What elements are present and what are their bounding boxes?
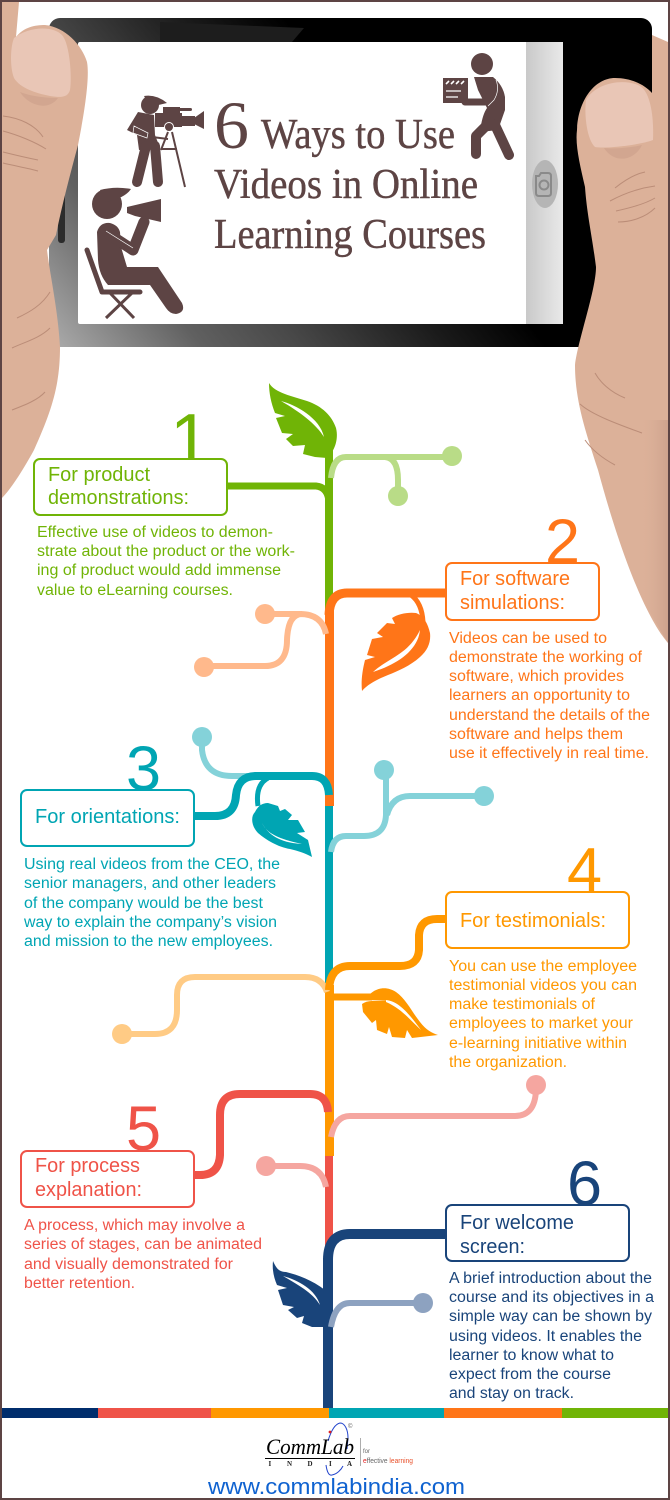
icon: teal leaf bbox=[252, 803, 312, 857]
logo: for bbox=[363, 1449, 370, 1455]
panel 2: software simulations: use it effectively in real time. bbox=[449, 745, 649, 762]
panel 2: software simulations: software, which provides bbox=[449, 668, 624, 685]
icon: green leaf bbox=[269, 383, 337, 458]
panel 6: welcome screen: expect from the course bbox=[449, 1366, 611, 1383]
panel 2: software simulations: understand the details of the bbox=[449, 707, 650, 724]
branch group 6: navy bbox=[328, 1234, 446, 1327]
panel 6: welcome screen: For welcome bbox=[460, 1212, 574, 1234]
panel 1: product demonstrations: ing of product would add immense bbox=[37, 562, 281, 579]
branch group 5: red bbox=[194, 1075, 546, 1187]
panel 2: software simulations: Videos can be used to bbox=[449, 630, 607, 647]
logo bbox=[265, 1423, 413, 1475]
footer colour bar bbox=[2, 1408, 668, 1418]
panel 5: process explanation bbox=[21, 1094, 262, 1292]
logo: © bbox=[348, 1423, 353, 1430]
icon: clapperboard man bbox=[443, 53, 509, 155]
icon: cameraman bbox=[127, 96, 204, 187]
panel 1: product demonstrations: For product bbox=[48, 464, 150, 486]
icon: navy leaf bbox=[273, 1261, 325, 1327]
phone screen bbox=[78, 42, 563, 324]
icon: orange leaf bbox=[362, 613, 430, 691]
panel 2: software simulations: demonstrate the working of bbox=[449, 649, 643, 666]
number 2: 2 bbox=[545, 507, 580, 577]
logo: effective learning bbox=[363, 1458, 413, 1465]
panel 2: software simulations: software and helps them bbox=[449, 726, 623, 743]
branch group 3: teal bbox=[192, 727, 494, 852]
tree trunk bbox=[323, 450, 334, 1408]
panel 3: orientations: of the company would be the best bbox=[24, 895, 264, 912]
panel 6: welcome screen: simple way can be shown by bbox=[449, 1308, 652, 1325]
panel 6: welcome screen: screen: bbox=[460, 1236, 525, 1258]
panel 3: orientations: Using real videos from the CEO, the bbox=[24, 856, 280, 873]
panel 6: welcome screen: course and its objectives in a bbox=[449, 1289, 654, 1306]
panel 5: process explanation: For process bbox=[35, 1155, 140, 1177]
number 4: 4 bbox=[567, 836, 602, 906]
panel 1: product demonstrations bbox=[34, 400, 295, 599]
website url: www.commlabindia.com bbox=[207, 1474, 465, 1499]
icon: amber leaf bbox=[362, 988, 438, 1038]
number 3: 3 bbox=[126, 734, 161, 804]
panel 6: welcome screen: and stay on track. bbox=[449, 1385, 574, 1402]
title: Ways to Use bbox=[261, 112, 455, 158]
number 5: 5 bbox=[126, 1094, 161, 1164]
panel 2: software simulations: For software bbox=[460, 568, 570, 590]
panel 6: welcome screen bbox=[446, 1149, 654, 1402]
logo: CommLab bbox=[266, 1434, 354, 1459]
left hand bbox=[2, 2, 88, 498]
panel 3: orientations: and mission to the new employees. bbox=[24, 933, 273, 950]
panel 4: testimonials: the organization. bbox=[449, 1054, 567, 1071]
icon: director bbox=[87, 188, 183, 318]
number 1: 1 bbox=[170, 400, 210, 480]
panel 5: process explanation: A process, which may involve a bbox=[24, 1217, 245, 1234]
panel 1: product demonstrations: demonstrations: bbox=[48, 487, 189, 509]
right hand bbox=[575, 35, 668, 643]
panel 2: software simulations: learners an opportunity to bbox=[449, 687, 630, 704]
title: Videos in Online bbox=[214, 162, 478, 208]
title bbox=[214, 87, 486, 258]
panel 4: testimonials: testimonial videos you can bbox=[449, 977, 637, 994]
panel 1: product demonstrations: strate about the product or the work- bbox=[37, 543, 295, 560]
title: 6 bbox=[214, 87, 249, 163]
title: Learning Courses bbox=[214, 212, 486, 258]
panel 5: process explanation: series of stages, can be animated bbox=[24, 1236, 262, 1253]
panel 5: process explanation: better retention. bbox=[24, 1275, 135, 1292]
panel 1: product demonstrations: Effective use of videos to demon- bbox=[37, 524, 273, 541]
panel 4: testimonials: make testimonials of bbox=[449, 996, 596, 1013]
panel 1: product demonstrations: value to eLearning courses. bbox=[37, 582, 233, 599]
panel 3: orientations: For orientations: bbox=[35, 806, 180, 828]
panel 4: testimonials: employees to market your bbox=[449, 1015, 633, 1032]
number 6: 6 bbox=[567, 1149, 602, 1219]
panel 3: orientations bbox=[21, 734, 280, 950]
panel 4: testimonials: For testimonials: bbox=[460, 910, 606, 932]
panel 6: welcome screen: learner to know what to bbox=[449, 1347, 614, 1364]
panel 2: software simulations: simulations: bbox=[460, 592, 565, 614]
panel 6: welcome screen: A brief introduction about the bbox=[449, 1270, 652, 1287]
branch group 4: amber bbox=[112, 919, 446, 1044]
panel 5: process explanation: explanation: bbox=[35, 1179, 142, 1201]
panel 6: welcome screen: using videos. It enables the bbox=[449, 1328, 642, 1345]
panel 3: orientations: way to explain the company’s vision bbox=[23, 914, 277, 931]
panel 3: orientations: senior managers, and other leaders bbox=[24, 875, 276, 892]
logo: INDIA bbox=[268, 1460, 352, 1468]
panel 4: testimonials: e-learning initiative within bbox=[449, 1035, 627, 1052]
phone bbox=[49, 18, 652, 347]
branch group 2: orange bbox=[194, 593, 446, 677]
panel 5: process explanation: and visually demonstrated for bbox=[24, 1256, 233, 1273]
panel 4: testimonials bbox=[446, 836, 637, 1071]
panel 4: testimonials: You can use the employee bbox=[449, 958, 637, 975]
panel 2: software simulations bbox=[446, 507, 650, 762]
branch group 1: green bbox=[227, 446, 462, 506]
